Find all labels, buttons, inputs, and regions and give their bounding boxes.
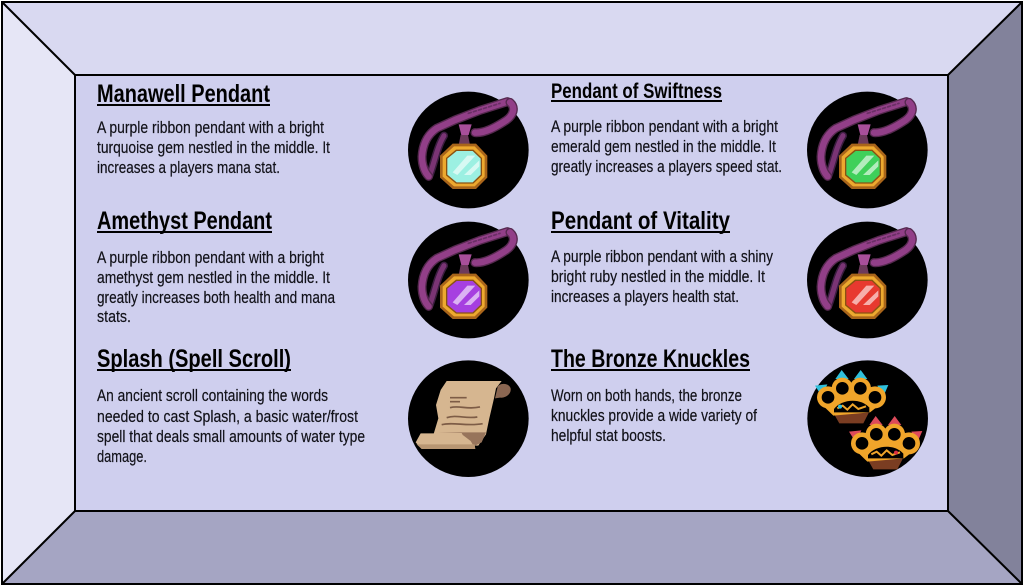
- item: Manawell Pendant text: A purple ribbon pendant with a bright: [97, 119, 324, 137]
- item: Splash (Spell Scroll) text: spell that deals small amounts of water type: [97, 428, 365, 446]
- panel: central content area: [75, 75, 948, 511]
- frame: left wall: [2, 2, 75, 584]
- item: Pendant of Vitality text: A purple ribbon pendant with a shiny: [551, 248, 774, 266]
- item: Pendant of Vitality text: Pendant of Vitality: [551, 207, 730, 235]
- item: Splash (Spell Scroll) text: An ancient scroll containing the words: [97, 387, 328, 405]
- item: Amethyst Pendant text: greatly increases both health and mana: [97, 289, 336, 307]
- item: The Bronze Knuckles text: helpful stat boosts.: [551, 427, 666, 445]
- item: Splash (Spell Scroll) text: Splash (Spell Scroll): [97, 345, 291, 373]
- item: Manawell Pendant text: increases a players mana stat.: [97, 159, 280, 177]
- item: Pendant of Vitality text: [551, 207, 774, 306]
- item: Pendant of Swiftness text: emerald gem nestled in the middle. It: [551, 138, 776, 156]
- frame: bottom wall: [2, 511, 1022, 584]
- frame: right wall: [948, 2, 1022, 584]
- item: Splash (Spell Scroll) text: damage.: [97, 448, 147, 466]
- item: Amethyst Pendant text: A purple ribbon pendant with a bright: [97, 249, 324, 267]
- item: Splash (Spell Scroll) text: needed to cast Splash, a basic water/frost: [97, 408, 358, 426]
- item: Pendant of Swiftness text: Pendant of Swiftness: [551, 80, 722, 103]
- item: Manawell Pendant text: turquoise gem nestled in the middle. It: [97, 139, 330, 157]
- icon: bronze knuckles: [807, 360, 928, 477]
- icon: emerald pendant: [807, 92, 928, 208]
- item: The Bronze Knuckles text: The Bronze Knuckles: [551, 345, 750, 373]
- frame: top wall: [2, 2, 1022, 75]
- item: The Bronze Knuckles text: Worn on both hands, the bronze: [551, 387, 742, 405]
- item: The Bronze Knuckles text: [551, 345, 757, 445]
- item: Pendant of Swiftness text: A purple ribbon pendant with a bright: [551, 118, 778, 136]
- item: The Bronze Knuckles text: knuckles provide a wide variety of: [551, 407, 757, 425]
- item: Amethyst Pendant text: [97, 207, 336, 326]
- item: Manawell Pendant text: Manawell Pendant: [97, 80, 271, 108]
- red-tipped knuckle: [849, 416, 922, 469]
- item: Manawell Pendant text: [97, 80, 330, 177]
- blue-tipped knuckle: [815, 370, 888, 423]
- icon: turquoise pendant: [408, 92, 529, 208]
- item: Pendant of Vitality text: bright ruby nestled in the middle. It: [551, 268, 765, 286]
- item: Pendant of Swiftness text: greatly increases a players speed stat.: [551, 158, 782, 176]
- item: Splash (Spell Scroll) text: [97, 345, 365, 466]
- icon: spell scroll: [408, 360, 529, 477]
- item: Pendant of Swiftness text: [551, 80, 782, 176]
- icon: ruby pendant: [807, 222, 928, 338]
- item: Amethyst Pendant text: stats.: [97, 308, 131, 326]
- item: Amethyst Pendant text: amethyst gem nestled in the middle. It: [97, 269, 330, 287]
- item: Pendant of Vitality text: increases a players health stat.: [551, 288, 739, 306]
- icon: amethyst pendant: [408, 222, 529, 338]
- item: Amethyst Pendant text: Amethyst Pendant: [97, 207, 273, 235]
